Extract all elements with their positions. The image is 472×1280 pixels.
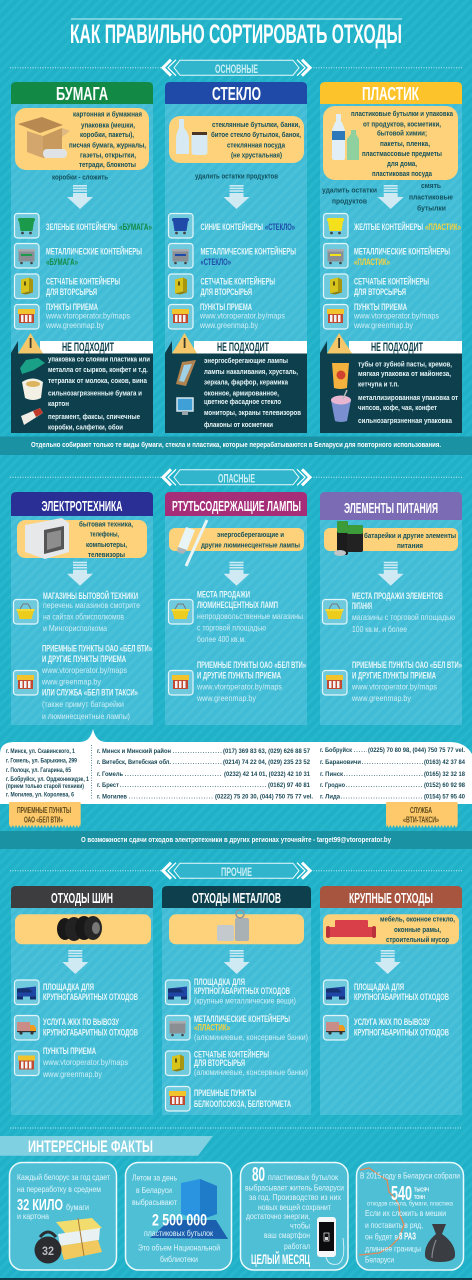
list: where to take electronics bbox=[14, 590, 152, 721]
list: where to take metal: КРУПНОГАБАРИТНЫХ ОТХОДОВ bbox=[194, 986, 290, 997]
list: phones, right column: (0152) 60 92 98 bbox=[424, 782, 465, 789]
warning: не подходит: лампы накаливания, хрусталь, bbox=[204, 367, 298, 376]
list: where to put plastic: www.vtoroperator.by/maps bbox=[353, 310, 439, 320]
list: where to put paper: «БУМАГА» bbox=[119, 222, 152, 233]
warning: не подходит: чипсов, кофе, чая, конфет bbox=[358, 403, 437, 412]
list: where to put glass: ПУНКТЫ ПРИЕМА bbox=[200, 302, 252, 313]
callout: what plastic goes in: бытовой химии; bbox=[377, 128, 427, 138]
icon: paper stack bbox=[56, 1218, 102, 1260]
card: 2 500 000 bottles bbox=[126, 1162, 232, 1270]
card: 80 bottles: за год. Производство из них bbox=[249, 1192, 342, 1202]
list: where to take tyres: КРУПНОГАБАРИТНЫХ ОТХОДОВ bbox=[43, 992, 138, 1003]
note: preparation: продуктов bbox=[332, 196, 367, 206]
card: 32 kg: на переработку в среднем bbox=[17, 1184, 101, 1194]
callout: bulky waste: строительный мусор bbox=[386, 935, 449, 944]
warning: не подходит: НЕ ПОДХОДИТ bbox=[62, 340, 114, 354]
panel: отходы шин: ОТХОДЫ ШИН bbox=[51, 890, 113, 907]
list: where to put plastic: ПУНКТЫ ПРИЕМА bbox=[354, 302, 407, 313]
callout: batteries: питания bbox=[397, 541, 423, 550]
callout: what glass goes in: стеклянные бутылки, банки, bbox=[212, 120, 300, 129]
list: where to put plastic bbox=[324, 214, 461, 330]
list: where to put glass: СЕТЧАТЫЕ КОНТЕЙНЕРЫ bbox=[200, 276, 275, 288]
list: where to take electronics: (также примут батарейки bbox=[42, 699, 124, 709]
list: where to put plastic: www.greenmap.by bbox=[353, 320, 414, 330]
callout: electronics: бытовая техника, bbox=[79, 520, 133, 528]
list: where to put paper: www.vtoroperator.by/maps bbox=[45, 310, 130, 320]
list: where to take lamps: ЛЮМИНЕСЦЕНТНЫХ ЛАМП bbox=[197, 600, 278, 611]
heading: стекло bbox=[165, 82, 307, 104]
list: where to take tyres: www.greenmap.by bbox=[42, 1069, 103, 1079]
arrow bbox=[375, 950, 401, 974]
card: 2 500 000 bottles: 2 500 000 bbox=[152, 1210, 207, 1230]
panel: пластик bbox=[320, 82, 462, 433]
callout: what paper goes in: упаковка (мешки, bbox=[81, 120, 135, 130]
callout: lamps: другие люминесцентные лампы bbox=[201, 540, 300, 550]
warning: не подходит: упаковка со слоями пластика или bbox=[48, 354, 150, 364]
list: collection point addresses: г. Гомель, ул. Барыкина, 299 bbox=[6, 758, 77, 764]
list: where to take batteries: ПИТАНИЯ bbox=[352, 601, 372, 612]
list: where to take lamps: МЕСТА ПРОДАЖИ bbox=[197, 590, 250, 600]
list: where to take bulky waste: ПЛОЩАДКА ДЛЯ bbox=[354, 982, 404, 993]
list: phones, right column: г. Бобруйск bbox=[320, 746, 353, 754]
callout: what glass goes in: стеклянная посуда bbox=[227, 140, 286, 150]
warning: не подходит: кетчупа и т.п. bbox=[358, 380, 399, 388]
section divider: прочие: ПРОЧИЕ bbox=[221, 865, 252, 879]
callout: bulky waste: оконные рамы, bbox=[394, 925, 441, 934]
note: preparation: коробки - сложить bbox=[52, 172, 108, 182]
callout: what plastic goes in: пакеты, пленка, bbox=[380, 139, 430, 148]
list: where to put glass: www.greenmap.by bbox=[199, 320, 259, 330]
arrow bbox=[224, 950, 250, 974]
label: служба вти-такси: «ВТИ-ТАКСИ» bbox=[403, 814, 439, 824]
heading: крупные отходы bbox=[320, 886, 462, 908]
warning: не подходит: цветное фасадное стекло bbox=[204, 397, 281, 406]
list: where to take batteries: www.greenmap.by bbox=[351, 693, 412, 703]
list: where to put glass: СИНИЕ КОНТЕЙНЕРЫ bbox=[200, 221, 263, 233]
card: 2 500 000 bottles: выбрасывают bbox=[132, 1197, 177, 1207]
callout: lamps bbox=[169, 520, 304, 566]
list: where to take metal: (алюминиевые, консервные банки) bbox=[194, 1032, 308, 1042]
list: phones, right column bbox=[320, 746, 465, 800]
callout: what paper goes in: тетради, блокноты bbox=[79, 160, 136, 169]
callout: electronics: компьютеры, bbox=[86, 540, 127, 549]
card: 2 500 000 bottles: библиотеки bbox=[160, 1254, 198, 1264]
list: where to take lamps: ПРИЕМНЫЕ ПУНКТЫ ОАО «БЕЛ ВТИ» bbox=[197, 660, 306, 671]
card: 32 kg: 32 КИЛО bbox=[17, 1197, 63, 1214]
callout: what paper goes in bbox=[15, 108, 149, 170]
warning: не подходит: оконное, армированное, bbox=[204, 388, 279, 398]
callout: lamps: энергосберегающие и bbox=[217, 530, 284, 539]
list: where to take batteries: www.vtoroperator.by/maps bbox=[351, 682, 437, 692]
callout: electronics: телевизоры bbox=[88, 550, 125, 559]
card: 540 thousand tonnes: и поставить в ряд, bbox=[365, 1220, 423, 1230]
card: 540 thousand tonnes: он будет в bbox=[365, 1232, 398, 1242]
list: where to take metal bbox=[166, 977, 308, 1111]
note band: other regions: О возможности сдачи отходов электротехники в других регионах уточняйте - target99@vtoroperator.by bbox=[81, 835, 392, 844]
callout: what paper goes in: газеты, открытки, bbox=[80, 150, 136, 160]
icon: national library bbox=[150, 1179, 228, 1239]
heading: интересные факты: ИНТЕРЕСНЫЕ ФАКТЫ bbox=[28, 1137, 153, 1156]
card: 80 bottles bbox=[240, 1162, 348, 1270]
arrow bbox=[62, 950, 88, 974]
arrow bbox=[224, 185, 250, 209]
arrow bbox=[378, 185, 404, 209]
list: where to take electronics: и люминесцентные лампы) bbox=[42, 711, 130, 721]
callout: what glass goes in: (не хрустальная) bbox=[231, 150, 282, 160]
card: 540 thousand tonnes: отходов стекла, бумаги, пластика bbox=[367, 1200, 453, 1208]
list: where to take tyres: ПЛОЩАДКА ДЛЯ bbox=[43, 982, 94, 993]
card: 32 kg: и картона bbox=[17, 1211, 49, 1221]
heading: отходы металлов bbox=[162, 886, 311, 908]
warning: не подходит: НЕ ПОДХОДИТ bbox=[371, 340, 423, 354]
list: where to take electronics: перечень магазинов смотрите bbox=[43, 600, 140, 610]
list: where to take tyres: ПУНКТЫ ПРИЕМА bbox=[43, 1046, 96, 1057]
panel: стекло: СТЕКЛО bbox=[212, 84, 261, 104]
list: where to take tyres bbox=[14, 980, 138, 1079]
list: phones, left column bbox=[97, 747, 423, 800]
list: where to put glass: ДЛЯ ВТОРСЫРЬЯ bbox=[200, 287, 252, 298]
section divider: основные: ОСНОВНЫЕ bbox=[215, 62, 258, 76]
list: where to take batteries: 100 кв.м. и более bbox=[352, 624, 407, 634]
card: 80 bottles: достаточно энергии, bbox=[246, 1211, 310, 1221]
callout: electronics bbox=[17, 518, 147, 559]
list: where to take electronics: www.vtoroperator.by/maps bbox=[41, 665, 127, 675]
callout: what plastic goes in: для дома, bbox=[387, 159, 417, 168]
heading: отходы шин bbox=[11, 886, 153, 908]
list: phones, left column: г. Брест bbox=[97, 782, 119, 789]
note band: only recyclable types bbox=[0, 436, 472, 455]
heading: пластик bbox=[320, 82, 462, 104]
icon: map border of Belarus bbox=[359, 1168, 404, 1255]
arrow bbox=[67, 185, 93, 209]
heading: элементы питания bbox=[320, 492, 462, 520]
card: 32 kg bbox=[10, 1162, 116, 1270]
list: where to put paper: «БУМАГА» bbox=[46, 257, 78, 268]
card: 540 thousand tonnes: 540 bbox=[391, 1183, 412, 1205]
label: приемные пункты: ОАО «БЕЛ ВТИ» bbox=[24, 814, 63, 824]
card: 80 bottles: чтобы bbox=[290, 1220, 310, 1230]
list: phones, left column: г. Могилев bbox=[97, 794, 127, 800]
list: where to take metal: ДЛЯ ВТОРСЫРЬЯ bbox=[194, 1058, 245, 1069]
list: phones, right column: г. Гродно bbox=[320, 782, 345, 789]
list: phones, left column: г. Гомель bbox=[97, 771, 123, 778]
panel: ртутьсодержащие лампы: РТУТЬСОДЕРЖАЩИЕ ЛАМПЫ bbox=[172, 498, 301, 515]
note: preparation: смять bbox=[421, 181, 441, 190]
list: where to take lamps: www.vtoroperator.by/maps bbox=[196, 682, 282, 692]
list: where to take metal: ПЛОЩАДКА ДЛЯ bbox=[194, 977, 245, 988]
section divider: основные bbox=[10, 60, 462, 76]
callout: what glass goes in bbox=[169, 116, 304, 163]
list: phones, left column: г. Минск и Минский район bbox=[97, 747, 171, 755]
list: where to take metal: БЕЛКООПСОЮЗА, БЕЛВТОРМЕТА bbox=[194, 1099, 291, 1110]
card: 540 thousand tonnes: 8 РАЗ bbox=[399, 1232, 416, 1242]
list: where to put glass: «СТЕКЛО» bbox=[265, 222, 295, 233]
list: where to put glass: «СТЕКЛО» bbox=[200, 257, 231, 268]
card: 80 bottles: работал bbox=[284, 1241, 310, 1251]
arrow bbox=[224, 562, 250, 586]
panel: элементы питания bbox=[320, 492, 462, 725]
panel: бумага bbox=[11, 82, 153, 433]
panel: бумага: БУМАГА bbox=[56, 84, 108, 104]
list: where to take metal: «ПЛАСТИК» bbox=[194, 1022, 230, 1034]
list: where to take electronics: www.greenmap.by bbox=[41, 676, 102, 686]
panel: ртутьсодержащие лампы bbox=[165, 492, 307, 725]
card: 2 500 000 bottles: Это объем Национальной bbox=[138, 1242, 220, 1252]
note: preparation: пластиковые bbox=[409, 192, 453, 202]
panel: contacts bbox=[0, 729, 472, 804]
list: phones, right column: г. Лида bbox=[320, 794, 340, 800]
label: служба вти-такси bbox=[386, 802, 458, 828]
warning: не подходит: энергосберегающие лампы bbox=[204, 356, 288, 365]
heading: ртутьсодержащие лампы bbox=[165, 492, 307, 516]
callout: what plastic goes in: пластиковая посуда bbox=[372, 169, 433, 178]
list: where to take electronics: ИЛИ СЛУЖБА «БЕЛ ВТИ ТАКСИ» bbox=[42, 688, 138, 698]
card: 540 thousand tonnes bbox=[356, 1162, 464, 1270]
icon: kettlebell: 32 bbox=[42, 1244, 54, 1258]
warning: не подходит: мониторы, экраны телевизоров bbox=[204, 408, 301, 417]
list: phones, left column: (0222) 75 20 30, (044) 750 75 77 vel. bbox=[215, 794, 313, 800]
callout: what paper goes in: писчая бумага, журналы, bbox=[69, 140, 146, 150]
panel: крупные отходы bbox=[320, 886, 462, 1115]
list: where to put plastic: ЖЕЛТЫЕ КОНТЕЙНЕРЫ bbox=[353, 221, 423, 233]
list: where to put paper: СЕТЧАТЫЕ КОНТЕЙНЕРЫ bbox=[46, 276, 120, 288]
arrow bbox=[67, 562, 93, 586]
card: 80 bottles: ЦЕЛЫЙ МЕСЯЦ bbox=[251, 1250, 310, 1267]
warning: не подходит: зеркала, фарфор, керамика bbox=[204, 378, 289, 386]
list: where to take lamps bbox=[168, 590, 306, 703]
callout: what plastic goes in: от продуктов, косметики, bbox=[363, 120, 441, 128]
list: where to take lamps: с торговой площадью bbox=[197, 622, 266, 632]
card: 540 thousand tonnes: ТЫСЯЧ bbox=[414, 1188, 429, 1194]
section divider: прочие bbox=[10, 863, 462, 879]
panel: стекло bbox=[165, 82, 307, 433]
list: where to take metal: МЕТАЛЛИЧЕСКИЕ КОНТЕЙНЕРЫ bbox=[194, 1013, 290, 1025]
card: 2 500 000 bottles: пластиковых бутылок bbox=[144, 1228, 213, 1238]
list: where to take lamps: непродовольственные магазины bbox=[197, 611, 303, 621]
list: where to take lamps: И ДРУГИЕ ПУНКТЫ ПРИЕМА bbox=[197, 670, 281, 682]
warning: не подходит: тетрапак от молока, соков, вина bbox=[48, 376, 148, 385]
list: phones, left column: г. Витебск, Витебская обл. bbox=[97, 758, 171, 766]
warning: не подходит: коробки, салфетки, обои bbox=[48, 422, 123, 432]
list: phones, right column: г. Барановичи bbox=[320, 759, 361, 766]
list: collection point addresses: (прием только старой техники) bbox=[6, 782, 84, 790]
warning: не подходит: флаконы от косметики bbox=[204, 420, 273, 429]
list: where to put plastic: «ПЛАСТИК» bbox=[354, 257, 390, 268]
panel: отходы шин bbox=[11, 886, 153, 1115]
warning: не подходит: мягкая упаковка от майонеза, bbox=[358, 369, 451, 378]
card: 32 kg: бумаги bbox=[66, 1202, 89, 1212]
warning: не подходит: картон bbox=[48, 399, 69, 408]
list: phones, left column: (0232) 42 14 01, (0232) 42 10 31 bbox=[224, 771, 310, 778]
callout: what paper goes in: картонная и бумажная bbox=[73, 110, 142, 118]
list: phones, left column: (0162) 97 40 81 bbox=[268, 782, 310, 789]
panel: отходы металлов bbox=[162, 886, 311, 1115]
list: where to put glass: www.vtoroperator.by/maps bbox=[199, 310, 285, 320]
list: where to take electronics: И ДРУГИЕ ПУНКТЫ ПРИЕМА bbox=[42, 654, 126, 665]
label: приемные пункты: ПРИЕМНЫЕ ПУНКТЫ bbox=[17, 805, 71, 815]
list: where to take lamps: более 400 кв.м. bbox=[197, 634, 246, 644]
note: preparation bbox=[322, 181, 453, 212]
panel: пластик: ПЛАСТИК bbox=[362, 84, 420, 104]
card: 540 thousand tonnes: ТОНН bbox=[414, 1195, 425, 1201]
list: where to put paper: ДЛЯ ВТОРСЫРЬЯ bbox=[46, 287, 97, 298]
list: collection point addresses bbox=[6, 748, 89, 798]
list: where to take electronics: МАГАЗИНЫ БЫТОВОЙ ТЕХНИКИ bbox=[43, 590, 138, 602]
list: where to put glass bbox=[168, 214, 296, 330]
card: 80 bottles: пластиковых бутылок bbox=[268, 1172, 338, 1182]
note: preparation: удалить остатки bbox=[322, 186, 377, 194]
card: 540 thousand tonnes: длиннее границы bbox=[365, 1244, 421, 1254]
list: collection point addresses: г. Минск, ул. Скавинского, 1 bbox=[6, 748, 75, 755]
list: where to put glass: МЕТАЛЛИЧЕСКИЕ КОНТЕЙНЕРЫ bbox=[200, 246, 296, 258]
icon: garbage bag bbox=[425, 1224, 455, 1262]
list: where to take bulky waste bbox=[324, 980, 449, 1040]
icon: smartphone bbox=[317, 1217, 344, 1264]
card: 2 500 000 bottles: в Беларуси bbox=[136, 1185, 172, 1195]
list: where to take tyres: КРУПНОГАБАРИТНЫХ ОТХОДОВ bbox=[43, 1028, 138, 1038]
list: phones, right column: (0163) 42 37 84 bbox=[424, 759, 465, 766]
list: where to take metal: (алюминиевые, консервные банки) bbox=[194, 1067, 308, 1077]
label: приемные пункты bbox=[9, 802, 81, 828]
callout: bulky waste: мебель, оконное стекло, bbox=[380, 914, 455, 924]
callout: bulky waste bbox=[323, 914, 459, 944]
list: where to put plastic: ДЛЯ ВТОРСЫРЬЯ bbox=[354, 287, 406, 298]
warning: не подходит bbox=[165, 333, 307, 433]
list: collection point addresses: г. Полоцк, ул. Гагарина, 65 bbox=[6, 767, 71, 774]
list: collection point addresses: г. Бобруйск, ул. Орджоникидзе, 1 bbox=[6, 775, 89, 783]
card: 80 bottles: 80 bbox=[252, 1164, 265, 1186]
list: where to take tyres: www.vtoroperator.by/maps bbox=[42, 1057, 128, 1067]
warning: не подходит: сильнозагрязненные бумага и bbox=[48, 388, 142, 398]
list: collection point addresses: г. Могилев, ул. Королева, 6 bbox=[6, 792, 74, 798]
list: where to put paper: www.greenmap.by bbox=[45, 320, 105, 330]
label: служба вти-такси: СЛУЖБА bbox=[410, 805, 432, 815]
list: where to take tyres: УСЛУГА ЖКХ ПО ВЫВОЗУ bbox=[43, 1017, 119, 1028]
card: 32 kg: Каждый белорус за год сдает bbox=[17, 1172, 110, 1182]
list: where to put paper: ЗЕЛЕНЫЕ КОНТЕЙНЕРЫ bbox=[46, 221, 117, 233]
card: 540 thousand tonnes: Если их сложить в мешки bbox=[365, 1208, 446, 1218]
heading: электротехника bbox=[11, 492, 153, 516]
list: where to take electronics: и Мингорисполкома bbox=[43, 623, 107, 633]
list: where to take batteries bbox=[322, 591, 462, 703]
callout: batteries bbox=[324, 521, 458, 556]
section divider: опасные bbox=[10, 469, 462, 486]
card: 80 bottles: ваш смартфон bbox=[264, 1230, 310, 1240]
card: 2 500 000 bottles: Летом за день bbox=[132, 1172, 177, 1182]
card: 80 bottles: новых вещей сохранит bbox=[258, 1202, 331, 1212]
arrow bbox=[378, 562, 404, 586]
list: where to put paper: ПУНКТЫ ПРИЕМА bbox=[46, 302, 98, 313]
list: phones, left column: (0214) 74 22 04, (029) 235 23 52 bbox=[223, 759, 310, 766]
list: where to put paper: МЕТАЛЛИЧЕСКИЕ КОНТЕЙНЕРЫ bbox=[46, 246, 142, 258]
list: where to take electronics: ПРИЕМНЫЕ ПУНКТЫ ОАО «БЕЛ ВТИ» bbox=[42, 644, 152, 654]
list: where to take lamps: www.greenmap.by bbox=[196, 693, 257, 703]
warning: не подходит bbox=[11, 333, 153, 433]
note band: other regions bbox=[0, 831, 472, 849]
callout: what glass goes in: битое стекло бутылок, банок, bbox=[211, 130, 301, 139]
card: 540 thousand tonnes: Беларуси bbox=[365, 1254, 394, 1264]
list: where to take bulky waste: УСЛУГА ЖКХ ПО ВЫВОЗУ bbox=[354, 1017, 430, 1028]
warning: не подходит bbox=[320, 333, 462, 433]
list: where to take electronics: на сайтах облисполкомов bbox=[43, 612, 124, 622]
note: preparation: удалить остатки продуктов bbox=[195, 172, 278, 180]
list: where to put paper bbox=[14, 214, 152, 330]
warning: не подходит: НЕ ПОДХОДИТ bbox=[217, 340, 269, 354]
callout: what plastic goes in: пластмассовые предметы bbox=[362, 149, 442, 158]
warning: не подходит: металла от сырков, конфет и т.д. bbox=[48, 365, 148, 374]
panel: электротехника bbox=[11, 492, 153, 725]
callout: what plastic goes in bbox=[323, 106, 458, 180]
warning: не подходит: тубы от зубной пасты, кремов, bbox=[358, 360, 452, 368]
warning: не подходит: сильнозагрязненная упаковка bbox=[358, 416, 453, 425]
note: preparation: бутылки bbox=[417, 204, 446, 212]
list: phones, right column: (0165) 32 32 18 bbox=[424, 771, 465, 778]
callout: what paper goes in: коробки, пакеты), bbox=[80, 130, 134, 139]
callout: metal bbox=[169, 910, 304, 944]
heading: бумага bbox=[11, 82, 153, 104]
section divider: опасные: ОПАСНЫЕ bbox=[218, 472, 255, 486]
list: where to take metal: ПРИЕМНЫЕ ПУНКТЫ bbox=[194, 1088, 256, 1099]
card: 80 bottles: выбрасывает житель Беларуси bbox=[245, 1182, 344, 1192]
warning: не подходит: пергамент, факсы, спичечные bbox=[48, 412, 140, 421]
list: where to take metal: СЕТЧАТЫЕ КОНТЕЙНЕРЫ bbox=[194, 1048, 269, 1060]
panel: отходы металлов: ОТХОДЫ МЕТАЛЛОВ bbox=[192, 890, 281, 907]
callout: tyres bbox=[15, 914, 151, 944]
list: where to take metal: (крупные металлические вещи) bbox=[194, 996, 296, 1006]
list: phones, right column: г. Пинск bbox=[320, 771, 344, 778]
callout: electronics: телефоны, bbox=[90, 530, 119, 538]
list: phones, right column: (0154) 57 95 40 bbox=[424, 794, 465, 800]
list: phones, left column: (017) 369 83 63, (029) 626 88 57 bbox=[223, 748, 310, 755]
panel: электротехника: ЭЛЕКТРОТЕХНИКА bbox=[42, 498, 123, 515]
